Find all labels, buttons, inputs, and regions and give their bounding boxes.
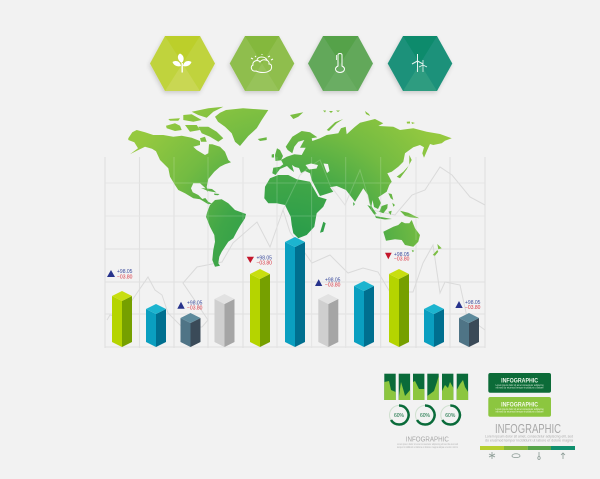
map: Arctic dots [323, 110, 415, 124]
label 1: −03.80 [117, 274, 133, 280]
right infographic caption: INFOGRAPHIC [495, 421, 561, 436]
map: Madagascar [320, 222, 326, 233]
donut 1: 60% [394, 413, 405, 419]
label 5: +98.05 [394, 252, 410, 258]
world map [128, 107, 452, 267]
bar 2 [146, 304, 166, 347]
donut 3: 60% [445, 413, 456, 419]
left infographic caption: tempor incididunt ut labore et dolore magna aliqua ut enim minim [397, 445, 458, 449]
bar 7 [318, 294, 338, 347]
label 6 [455, 300, 481, 311]
map: inland seas [306, 164, 330, 173]
label 1 [107, 269, 133, 280]
label 3: +98.05 [256, 256, 272, 262]
label 3 [247, 256, 272, 267]
map: Japan [397, 155, 412, 178]
label 5: −03.80 [394, 257, 410, 263]
dark green banner: Lorem ipsum dolor sit amet consectetur adipiscing [496, 384, 544, 387]
right infographic caption: Lorem ipsum dolor sit amet, consectetur adipiscing elit, sed [485, 434, 573, 438]
map: Novaya Zemlya [327, 119, 343, 131]
right infographic caption [485, 421, 573, 442]
grid showing through the map [105, 157, 485, 348]
light green banner [488, 397, 551, 417]
label 4: +98.05 [325, 278, 341, 284]
map: Iceland [258, 137, 267, 141]
mini area charts [384, 374, 468, 400]
hexagon: sun and cloud [230, 36, 294, 91]
donut 2: 60% [420, 413, 431, 419]
chart grid [105, 157, 485, 348]
map: North America [128, 130, 231, 204]
bar 8 [354, 281, 374, 347]
bar 5 [250, 269, 270, 347]
hexagon: thermometer [308, 36, 373, 91]
left infographic caption [397, 434, 458, 449]
left infographic caption: INFOGRAPHIC [406, 434, 449, 444]
bar 11 [459, 313, 479, 347]
map: Australia and New Zealand [383, 220, 442, 256]
map: Southeast Asia islands [353, 193, 419, 220]
colour strip [480, 446, 575, 450]
dark green banner: INFOGRAPHIC [501, 378, 539, 384]
dark green banner: elit sed do eiusmod tempor incididunt ut labore [496, 386, 544, 390]
left infographic caption: Lorem ipsum dolor sit amet consectetur adipiscing elit sed do eiusmod [397, 442, 458, 446]
bar 1 [112, 291, 132, 347]
small strip icons [489, 452, 565, 460]
map: Svalbard [290, 112, 303, 119]
map: Caribbean islands [201, 188, 220, 195]
bar chart [112, 237, 479, 347]
value labels [107, 252, 481, 312]
label 6: −03.80 [465, 305, 481, 311]
donut gauges [390, 405, 460, 424]
label 3: −03.80 [256, 261, 272, 267]
map: Africa [264, 175, 327, 238]
bar 3 [180, 313, 200, 347]
label 6: +98.05 [465, 300, 481, 306]
label 5 [385, 252, 410, 263]
hexagon: plant [150, 36, 215, 91]
label 2: −03.80 [187, 306, 203, 312]
map: Arctic islands [166, 107, 223, 142]
label 2: +98.05 [187, 300, 203, 306]
right infographic caption: do eiusmod tempor incididunt ut labore et dolore magna [485, 438, 573, 442]
dark green banner [488, 373, 551, 393]
map: South America [206, 199, 246, 267]
label 1: +98.05 [117, 269, 133, 275]
line chart traces [107, 160, 485, 330]
bar 9 [389, 269, 409, 347]
bar 4 [214, 294, 234, 347]
light green banner: INFOGRAPHIC [501, 402, 539, 408]
bar 6 [285, 237, 305, 347]
label 4: −03.80 [325, 283, 341, 289]
light green banner: Lorem ipsum dolor sit amet consectetur adipiscing [496, 408, 544, 411]
map: Eurasia [272, 119, 452, 216]
label 4 [315, 278, 341, 289]
map: British Isles [272, 148, 283, 161]
bar 10 [424, 304, 444, 347]
hexagon: wind turbines [388, 36, 452, 91]
label 2 [177, 300, 203, 312]
light green banner: elit sed do eiusmod tempor incididunt ut labore [496, 410, 544, 414]
map: Greenland [215, 108, 268, 146]
